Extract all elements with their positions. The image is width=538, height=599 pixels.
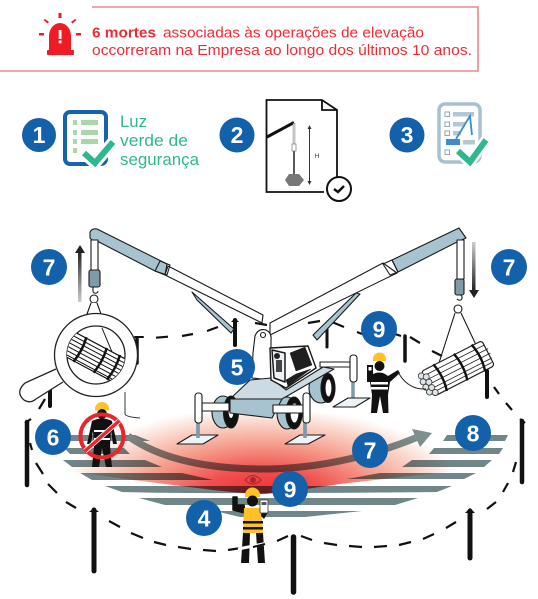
badge 6: 6	[47, 424, 59, 450]
badge 2	[220, 118, 254, 152]
lift arrow down	[469, 242, 479, 298]
ground lanes	[63, 435, 508, 517]
worker with remote at load	[367, 352, 426, 413]
right boom	[270, 228, 477, 366]
badge 3: 3	[401, 122, 413, 148]
badge 1: 1	[33, 122, 46, 148]
magnifier with load detail	[20, 314, 137, 402]
label: luz verde de segurança: segurança	[120, 150, 200, 169]
front wheels	[212, 396, 302, 429]
icon: alarm siren	[39, 13, 81, 55]
curved moving arrow	[128, 429, 432, 469]
badge 9 bottom: 9	[284, 476, 296, 502]
perimeter posts	[27, 318, 522, 592]
callout text: associadas às operações de elevação	[163, 26, 424, 42]
badge 1	[22, 118, 56, 152]
badge 9 bottom	[272, 471, 308, 507]
label: luz verde de segurança: Luz	[120, 112, 147, 131]
badge 4: 4	[198, 506, 211, 532]
lift arrow up	[75, 245, 85, 302]
callout text: occorreram na Empresa ao longo dos últimos 10 anos.	[92, 43, 472, 59]
load side post	[485, 371, 489, 397]
badge 3	[390, 118, 424, 152]
left boom	[87, 229, 263, 333]
prohibited worker	[80, 402, 124, 467]
chassis front	[230, 399, 282, 418]
icon: lift checklist	[439, 104, 486, 162]
lifted load: pipe bundle	[415, 339, 497, 400]
icon: lifting plan document	[266, 100, 351, 201]
eye icon	[245, 476, 261, 484]
badge 7 centre	[352, 432, 388, 468]
front outriggers	[177, 393, 325, 444]
badge 8: 8	[467, 420, 480, 446]
badge 4	[186, 500, 222, 536]
badge 9 top	[361, 311, 397, 347]
badge 6	[35, 419, 71, 455]
left rear outrigger remnant	[125, 392, 140, 418]
badge 8	[455, 415, 491, 451]
badge 7 right: 7	[503, 254, 515, 280]
hazard zone glow	[60, 412, 465, 494]
badge 7 left	[31, 249, 67, 285]
icon: safety checklist	[65, 112, 113, 164]
crane	[87, 228, 477, 444]
badge 2: 2	[231, 122, 243, 148]
badge 9 top: 9	[373, 316, 385, 342]
signaller worker	[233, 488, 268, 563]
callout text: 6 mortes	[92, 26, 156, 42]
label: luz verde de segurança: verde de	[120, 131, 188, 150]
rear wheel	[309, 373, 335, 403]
badge 5: 5	[231, 354, 244, 380]
operator cab	[270, 346, 316, 388]
exclusion zone dashed perimeter	[25, 321, 525, 551]
badge 7 centre: 7	[364, 438, 376, 464]
badge 7 left: 7	[43, 254, 55, 280]
cab mount	[252, 330, 271, 380]
rear outrigger	[320, 355, 370, 407]
badge 7 right	[491, 249, 527, 285]
badge 5	[219, 349, 255, 385]
chassis deck	[230, 367, 334, 399]
callout: fatalities	[0, 7, 478, 71]
icon: lifting plan document: H	[315, 153, 320, 160]
